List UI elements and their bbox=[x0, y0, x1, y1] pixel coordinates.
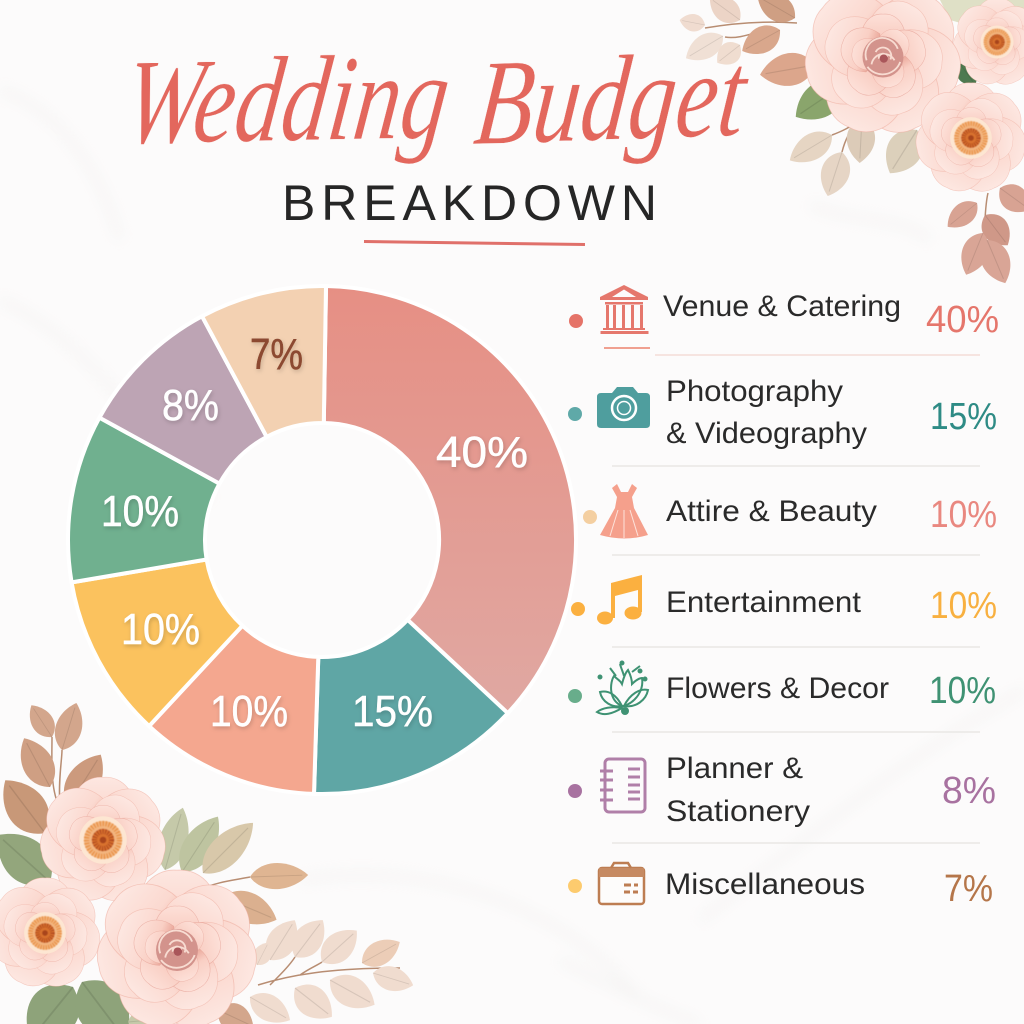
title underline bbox=[364, 242, 585, 244]
legend row: Attire & Beauty: Attire & Beauty bbox=[666, 495, 877, 528]
legend row: Venue & Catering bbox=[569, 285, 999, 349]
legend row: Venue & Catering: Venue & Catering bbox=[663, 290, 901, 323]
legend row: Photography & Videography: & Videography bbox=[666, 417, 867, 450]
legend row: Flowers & Decor bbox=[568, 662, 996, 715]
legend row: Planner & Stationery: 8% bbox=[942, 770, 996, 812]
segment: Miscellaneous 7% bbox=[202, 286, 326, 437]
donut percentage labels: 40% bbox=[436, 428, 528, 477]
legend row: Flowers & Decor: Flowers & Decor bbox=[666, 672, 889, 705]
legend row: Entertainment: Entertainment bbox=[666, 586, 862, 619]
legend row: Entertainment: 10% bbox=[930, 585, 997, 627]
segment: Attire & Beauty 10% bbox=[149, 626, 318, 794]
donut percentage labels: 8% bbox=[162, 381, 219, 430]
donut percentage labels: 10% bbox=[210, 687, 288, 736]
legend row: Miscellaneous: 7% bbox=[944, 868, 993, 910]
segment: Planner & Stationery 8% bbox=[99, 316, 267, 484]
legend row: Attire & Beauty bbox=[583, 484, 997, 538]
legend row: Photography & Videography: Photography bbox=[666, 375, 843, 408]
donut percentage labels: 15% bbox=[352, 687, 433, 736]
floral corner: bottom left bbox=[0, 699, 417, 1024]
subtitle: BREAKDOWN: BREAKDOWN bbox=[282, 175, 657, 231]
title: Wedding Budget: Budget bbox=[469, 26, 755, 171]
legend row: Miscellaneous bbox=[568, 863, 993, 910]
legend row: Photography & Videography bbox=[568, 375, 997, 450]
legend row: Photography & Videography: 15% bbox=[930, 396, 997, 438]
title: Wedding Budget: Wedding bbox=[118, 29, 457, 170]
donut percentage labels: 10% bbox=[121, 605, 200, 654]
donut percentage labels: 10% bbox=[101, 487, 179, 536]
legend row: Attire & Beauty: 10% bbox=[930, 494, 997, 536]
legend row: Miscellaneous: Miscellaneous bbox=[665, 868, 865, 901]
legend row: Planner & Stationery: Planner & bbox=[666, 752, 803, 785]
legend row: Venue & Catering: 40% bbox=[926, 299, 999, 341]
legend row: Entertainment bbox=[571, 575, 997, 627]
floral corner: top right bbox=[678, 0, 1024, 289]
segment: Flowers & Decor 10% bbox=[68, 418, 219, 582]
donut percentage labels bbox=[101, 330, 528, 736]
donut percentage labels: 7% bbox=[250, 330, 303, 379]
legend row: Flowers & Decor: 10% bbox=[929, 670, 996, 712]
legend row: Planner & Stationery bbox=[568, 752, 996, 828]
legend bbox=[568, 285, 999, 910]
segment: Photography & Videography 15% bbox=[314, 620, 508, 794]
legend row: Planner & Stationery: Stationery bbox=[666, 795, 810, 828]
donut chart bbox=[68, 286, 576, 794]
title: Wedding Budget bbox=[118, 26, 755, 171]
segment: Venue & Catering 40% bbox=[324, 286, 576, 713]
segment: Entertainment 10% bbox=[72, 560, 242, 726]
